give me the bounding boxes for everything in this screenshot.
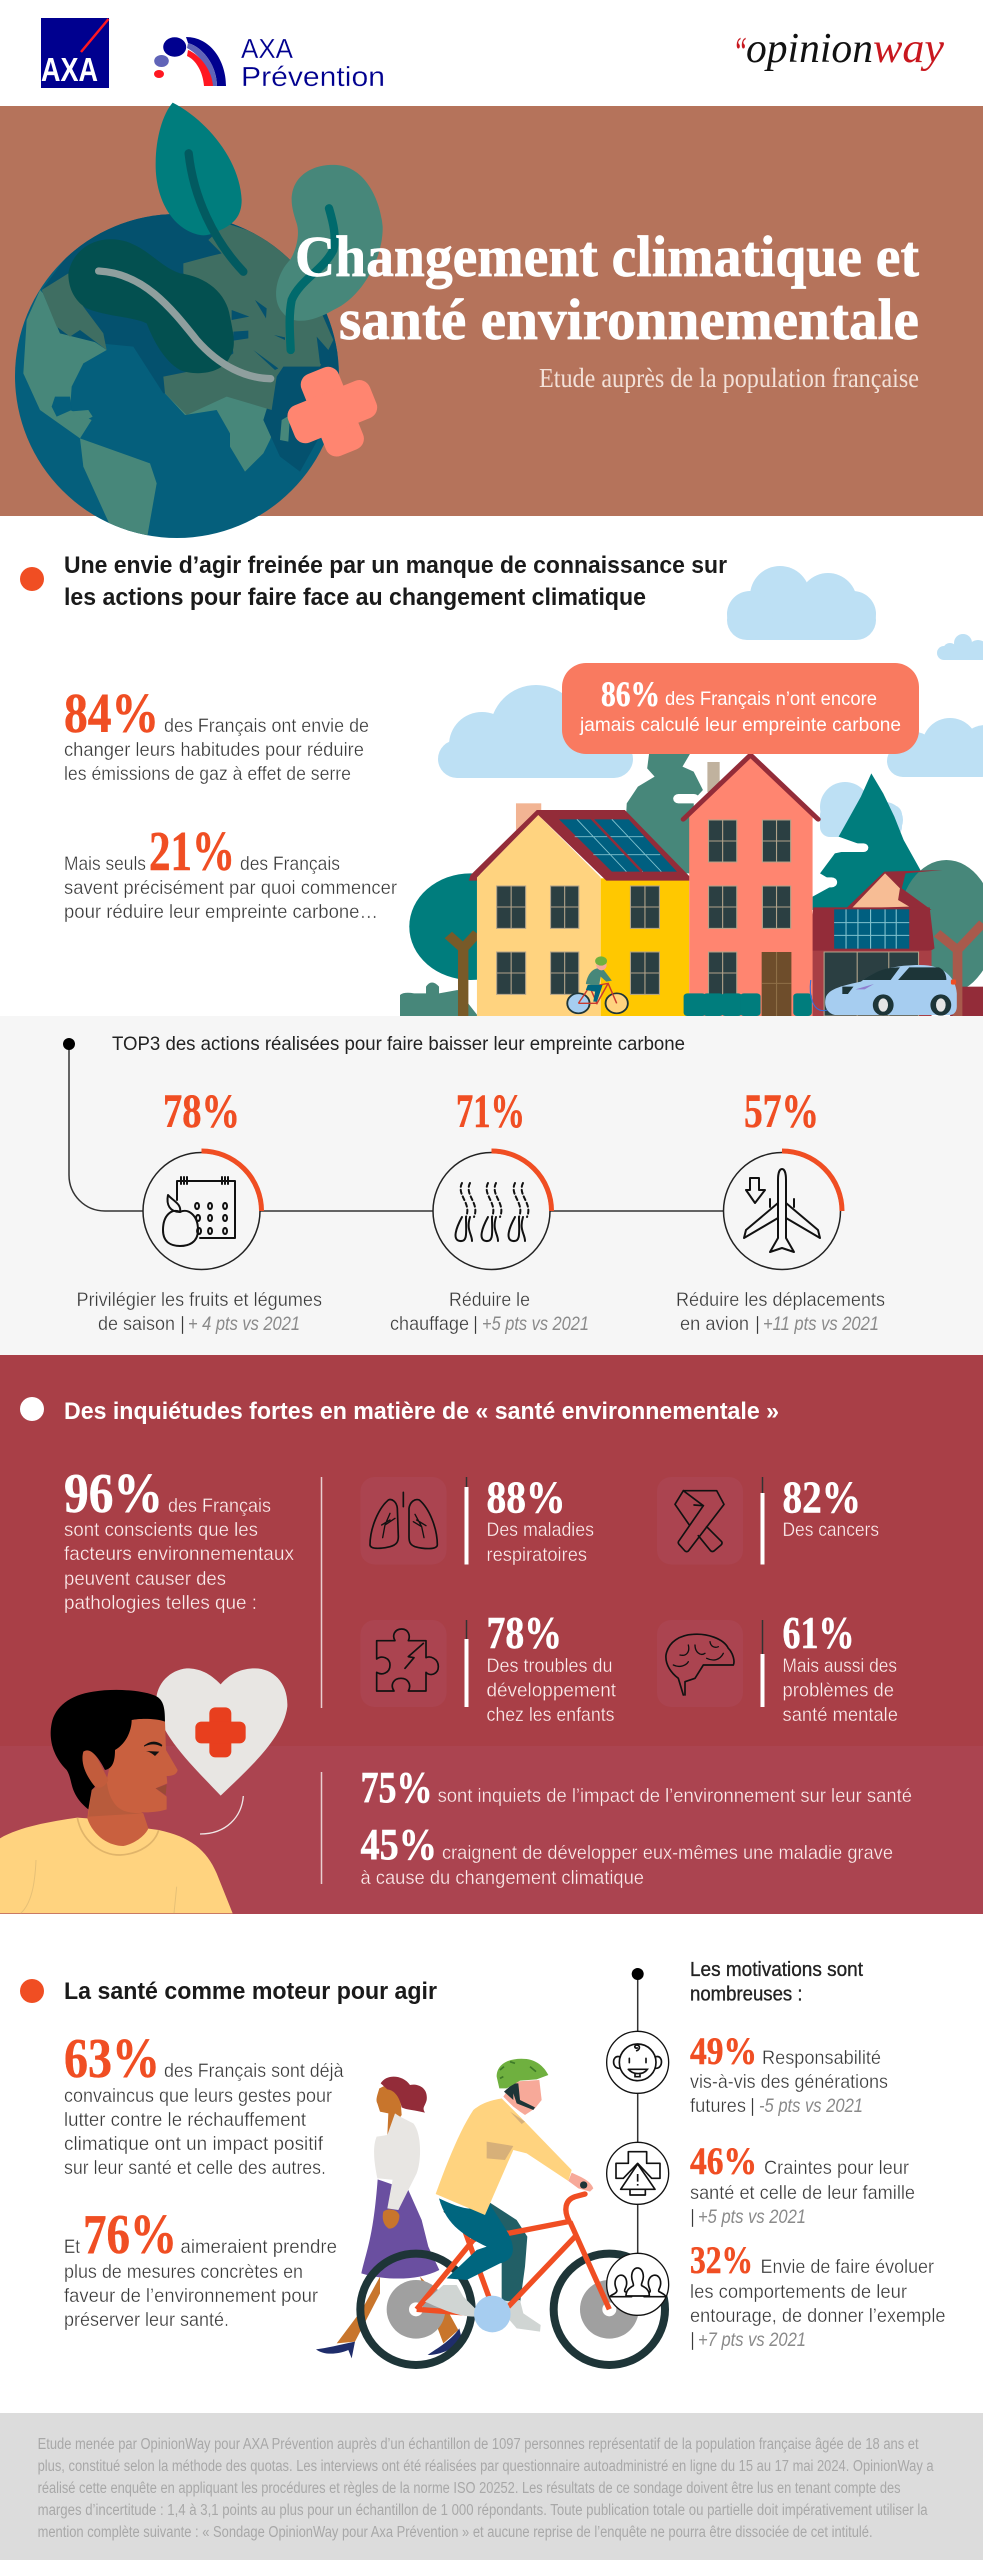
logo: OpinionWay	[733, 26, 944, 76]
icon: electric car charging	[810, 965, 957, 1016]
action 3: avion: Réduire les déplacements	[676, 1289, 885, 1311]
logo: OpinionWay: “	[733, 30, 747, 76]
stat: 63%: des Français sont déjà	[164, 2060, 344, 2082]
action 1: fruits et légumes: + 4 pts vs 2021	[188, 1313, 300, 1335]
stat: 78% troubles du développement: Des troubles du	[486, 1655, 612, 1677]
section heading: Des inquiétudes fortes en matière de « santé environnementale »	[64, 1398, 779, 1425]
stat: 76%: faveur de l’environnement pour	[64, 2285, 318, 2307]
left tree and hedge	[400, 873, 532, 1016]
action 2: chauffage: 71%	[456, 1085, 525, 1138]
stat: 21%: savent précisément par quoi commencer	[64, 877, 397, 899]
stat: 96%: 96%	[64, 1463, 163, 1525]
action 1: fruits et légumes: de saison	[98, 1313, 175, 1335]
action 1: fruits et légumes: Privilégier les fruits et légumes	[76, 1289, 322, 1311]
icon: small cyclist	[567, 956, 628, 1013]
motivation: 49%: 49%	[690, 2030, 757, 2073]
stat: 45%: 45%	[360, 1820, 437, 1869]
stat: 61% santé mentale: 61%	[782, 1607, 854, 1658]
woman	[316, 2077, 462, 2358]
back trees	[623, 754, 983, 1017]
stat: 84%: 84%	[64, 683, 159, 745]
stat: 96%: peuvent causer des	[64, 1568, 226, 1590]
motivation: 32%: entourage, de donner l’exemple	[690, 2305, 946, 2327]
icon: ribbon	[675, 1491, 724, 1552]
motivation: 32%	[690, 2239, 946, 2351]
icon: broken puzzle	[377, 1629, 438, 1691]
stat: 76%: Et	[64, 2236, 80, 2258]
title	[295, 224, 920, 352]
icon: globe with leaves and health cross	[15, 103, 390, 540]
motivation: 32%: Envie de faire évoluer	[760, 2256, 934, 2278]
stat: 96%: facteurs environnementaux	[64, 1543, 294, 1565]
stat: 88% maladies respiratoires: respiratoires	[486, 1544, 587, 1566]
logo: OpinionWay: way	[873, 26, 944, 72]
action 3: avion: en avion	[680, 1313, 749, 1335]
stat: 76%: plus de mesures concrètes en	[64, 2261, 303, 2283]
section heading: La santé comme moteur pour agir	[64, 1978, 437, 2005]
panel: santé environnementale	[0, 1355, 983, 1914]
action 1: fruits et légumes: 78%	[163, 1085, 240, 1138]
panel: TOP3 actions	[0, 1016, 983, 1355]
action 2: chauffage: Réduire le	[449, 1289, 530, 1311]
action 2: chauffage: |	[473, 1313, 478, 1335]
stat: 76%: aimeraient prendre	[180, 2236, 337, 2258]
icon: heart with cross	[156, 1668, 287, 1834]
motivation: 49%: -5 pts vs 2021	[759, 2095, 863, 2117]
footer methodology note	[0, 2413, 983, 2560]
motivation: 46%: 46%	[690, 2140, 757, 2183]
stat: 21%: pour réduire leur empreinte carbone…	[64, 901, 378, 923]
logo: AXA	[41, 18, 109, 88]
motivation icon: group of people	[607, 2253, 669, 2315]
callout: 86%: 86%	[601, 674, 660, 714]
bicycle frame	[417, 2194, 609, 2315]
timeline connector	[63, 1038, 724, 1211]
small house with solar roof	[809, 870, 943, 1016]
stat: 84%: changer leurs habitudes pour réduire	[64, 739, 364, 761]
motivation: 49%: |	[750, 2095, 755, 2117]
action 2: chauffage: +5 pts vs 2021	[482, 1313, 589, 1335]
icon: apple and calendar	[163, 1177, 235, 1246]
stat: 96%: pathologies telles que :	[64, 1592, 257, 1614]
action 3: avion: +11 pts vs 2021	[763, 1313, 879, 1335]
motivation: 46%: |	[690, 2206, 695, 2228]
motivation: 32%: +7 pts vs 2021	[698, 2329, 806, 2351]
motivation: 49%: futures	[690, 2095, 746, 2117]
stat: 45%	[360, 1820, 893, 1889]
stat: 21%: Mais seuls	[64, 853, 146, 875]
callout: 86%: jamais calculé leur empreinte carbone	[579, 714, 901, 736]
illustration: man with heart bubble	[0, 1668, 287, 1913]
stat: 88% maladies respiratoires: 88%	[486, 1472, 566, 1522]
timeline: motivations: Les motivations sont	[690, 1959, 863, 1981]
stat: 75%: 75%	[360, 1763, 432, 1812]
windows	[497, 820, 791, 995]
stat: 96%: des Français	[168, 1495, 271, 1517]
stat: 76%	[64, 2204, 337, 2331]
motivation icon: health warning	[607, 2142, 669, 2204]
stat: 61% santé mentale	[657, 1607, 898, 1726]
bicycle wheels	[360, 2254, 665, 2365]
stat: 61% santé mentale: Mais aussi des	[782, 1655, 897, 1677]
stat: 78% troubles du développement: chez les enfants	[486, 1704, 615, 1726]
action 3: avion	[676, 1085, 885, 1335]
logo: OpinionWay: opinion	[746, 26, 873, 72]
motivation: 46%: Craintes pour leur	[764, 2157, 909, 2179]
logo: AXA: AXA	[41, 51, 98, 88]
stat: 45%: à cause du changement climatique	[360, 1867, 644, 1889]
stat: 21%: des Français	[240, 853, 340, 875]
motivation icon: baby	[607, 2031, 669, 2093]
stat: 88% maladies respiratoires	[360, 1472, 594, 1566]
yellow house	[469, 803, 694, 1016]
motivation: 49%: Responsabilité	[762, 2047, 881, 2069]
stat: 78% troubles du développement	[360, 1607, 617, 1726]
stat: 78% troubles du développement: 78%	[486, 1607, 562, 1658]
stat: 84%	[64, 683, 369, 785]
motivation: 32%: |	[690, 2329, 695, 2351]
back leg	[487, 2202, 541, 2332]
stat: 63%: sur leur santé et celle des autres.	[64, 2157, 326, 2179]
stat: 63%: 63%	[64, 2028, 160, 2090]
action 1: fruits et légumes: |	[180, 1313, 185, 1335]
callout: 86%	[562, 663, 919, 754]
action 2: chauffage	[390, 1085, 589, 1335]
section heading: Une envie d’agir freinée par un manque de connaissance sur	[64, 552, 727, 579]
motivation: 46%	[690, 2140, 915, 2228]
icon: brain	[666, 1634, 734, 1695]
stat: 82% cancers: 82%	[782, 1472, 861, 1522]
pink house	[683, 755, 818, 1016]
header logos	[41, 18, 944, 92]
stat: 75%: sont inquiets de l’impact de l’environnement sur leur santé	[438, 1785, 912, 1807]
stat: 45%: craignent de développer eux-mêmes une maladie grave	[442, 1842, 893, 1864]
motivation: 32%: 32%	[690, 2239, 753, 2282]
title: santé environnementale	[339, 287, 919, 352]
logo: AXA Prévention	[154, 33, 385, 92]
stat: 82% cancers	[657, 1472, 879, 1564]
timeline: motivations: nombreuses :	[690, 1984, 802, 2006]
stat: 84%: des Français ont envie de	[164, 715, 369, 737]
hedges	[684, 993, 812, 1016]
action 1: fruits et légumes	[76, 1085, 322, 1335]
illustration: clouds	[438, 566, 983, 838]
icon: lungs	[370, 1492, 437, 1549]
stat: 88% maladies respiratoires: Des maladies	[486, 1519, 594, 1541]
motivation: 49%: vis-à-vis des générations	[690, 2071, 888, 2093]
section heading	[20, 552, 727, 611]
rider	[425, 2059, 593, 2332]
stat: 63%: climatique ont un impact positif	[64, 2133, 324, 2155]
logo: AXA Prévention: Prévention	[241, 61, 385, 92]
stat: 61% santé mentale: santé mentale	[782, 1704, 898, 1726]
panel: hero banner	[0, 103, 983, 540]
icon: plane with down arrow	[744, 1169, 820, 1252]
action 3: avion: 57%	[744, 1085, 819, 1138]
subtitle: Etude auprès de la population française	[539, 363, 919, 393]
stat: 96%	[64, 1463, 294, 1614]
callout: 86%: des Français n’ont encore	[665, 688, 877, 710]
stat: 21%: 21%	[149, 821, 235, 883]
section heading: les actions pour faire face au changement climatique	[64, 584, 646, 611]
illustration: woman and cyclist	[316, 2059, 665, 2365]
stat: 21%	[64, 821, 397, 923]
action 3: avion: |	[755, 1313, 760, 1335]
panel: envie d'agir	[20, 552, 983, 1017]
stat: 63%: convaincus que leurs gestes pour	[64, 2085, 332, 2107]
motivation: 46%: santé et celle de leur famille	[690, 2182, 915, 2204]
motivation: 46%: +5 pts vs 2021	[698, 2206, 806, 2228]
stat: 63%: lutter contre le réchauffement	[64, 2109, 307, 2131]
illustration: houses street	[400, 754, 983, 1017]
stat: 82% cancers: Des cancers	[782, 1519, 879, 1541]
motivation: 49%	[690, 2030, 888, 2117]
sub-heading: TOP3 des actions réalisées pour faire baisser leur empreinte carbone	[112, 1033, 685, 1055]
icon: heat waves	[456, 1183, 528, 1241]
action 2: chauffage: chauffage	[390, 1313, 469, 1335]
stat: 76%: 76%	[83, 2204, 177, 2266]
stat: 84%: les émissions de gaz à effet de serre	[64, 763, 351, 785]
motivation: 32%: les comportements de leur	[690, 2281, 907, 2303]
logo: AXA Prévention: AXA	[241, 33, 293, 64]
title: Changement climatique et	[295, 224, 920, 289]
stat: 63%	[64, 2028, 344, 2179]
stat: 76%: préserver leur santé.	[64, 2309, 229, 2331]
panel: la santé comme moteur	[20, 1959, 946, 2365]
stat: 78% troubles du développement: développement	[486, 1680, 617, 1702]
timeline: motivations	[632, 1959, 863, 2284]
stat: 75%	[360, 1763, 912, 1812]
stat: 61% santé mentale: problèmes de	[782, 1680, 894, 1702]
stat: 96%: sont conscients que les	[64, 1519, 258, 1541]
